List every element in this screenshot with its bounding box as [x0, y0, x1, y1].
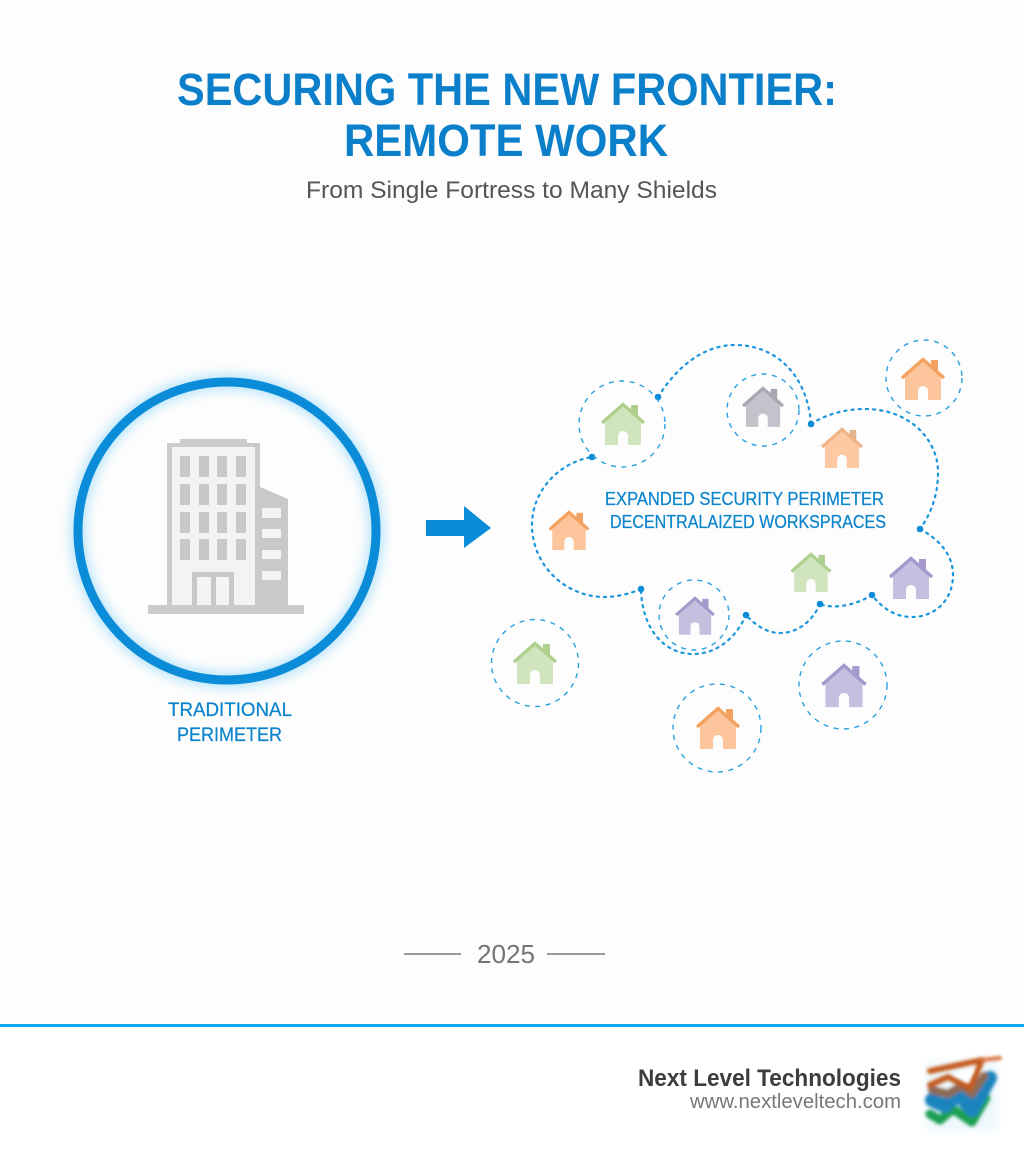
icon: office building [148, 439, 304, 614]
panel: expanded perimeter [492, 340, 962, 772]
icon: green house middle [791, 554, 831, 592]
year marker: 2025 [477, 939, 535, 969]
title [177, 64, 837, 166]
circle: perimeter ring [78, 382, 376, 680]
label: traditional perimeter: TRADITIONAL [168, 700, 292, 721]
label: traditional perimeter: PERIMETER [177, 725, 282, 746]
connection dots [589, 394, 923, 618]
icon: orange house left [549, 512, 589, 550]
icon: purple house lower middle [676, 598, 714, 635]
dashed shield circles [492, 340, 962, 772]
panel: traditional perimeter [78, 382, 376, 746]
title: SECURING THE NEW FRONTIER: [177, 64, 837, 115]
subtitle: From Single Fortress to Many Shields [306, 177, 717, 204]
label: traditional perimeter [168, 700, 292, 746]
icon: orange house bottom [697, 708, 739, 749]
icon: gray house [743, 388, 783, 427]
label: expanded security perimeter: EXPANDED SECURITY PERIMETER [605, 489, 884, 509]
company website: www.nextleveltech.com [689, 1091, 901, 1113]
label: expanded security perimeter: DECENTRALAIZED WORKSPRACES [610, 512, 886, 532]
label: expanded security perimeter [605, 489, 886, 532]
company name: Next Level Technologies [638, 1065, 901, 1092]
icon: purple house bottom right [822, 665, 866, 707]
icon: green house bottom left [514, 643, 556, 684]
arrow [426, 506, 491, 548]
footer band [0, 1024, 1024, 1154]
title: REMOTE WORK [344, 115, 668, 166]
icon: purple house right [890, 558, 932, 599]
icon: orange house top right [902, 359, 944, 400]
icon: company logo [926, 1058, 1000, 1130]
dotted cloud boundary [532, 345, 953, 654]
icon: green house top [602, 404, 644, 445]
icon: orange house center top [822, 429, 862, 468]
